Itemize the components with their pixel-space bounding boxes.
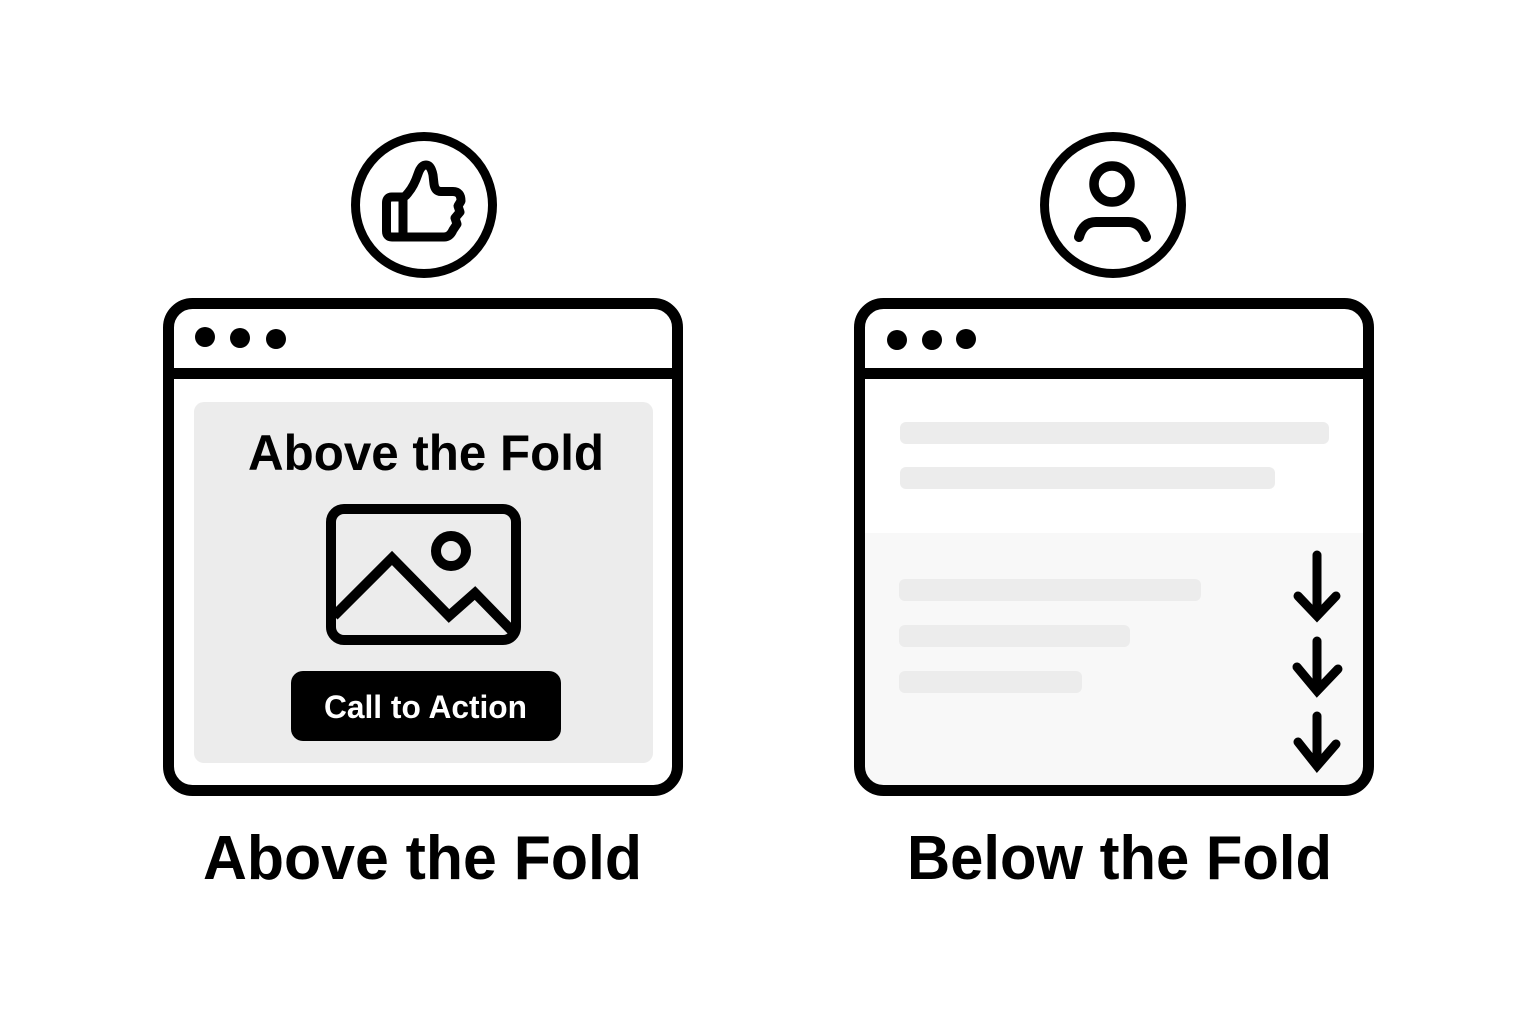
caption: below the fold: Below the Fold [907, 824, 1332, 893]
button: call to action [291, 671, 561, 741]
icon: thumbs up in circle [356, 136, 492, 274]
placeholder text lines [899, 422, 1329, 693]
caption: above the fold: Above the Fold [203, 824, 642, 893]
icon: scroll down arrows [1297, 555, 1338, 766]
button: call to action: Call to Action [324, 689, 527, 725]
window header divider [859, 368, 1369, 379]
browser window: below the fold [859, 304, 1369, 790]
content panel [194, 402, 653, 763]
panel: above the fold [168, 136, 678, 893]
panel: below the fold [859, 136, 1369, 893]
faded lower section [860, 533, 1368, 790]
panel heading: Above the Fold [248, 425, 604, 481]
browser window: above the fold [168, 304, 678, 790]
icon: user in circle [1044, 136, 1182, 274]
window header divider [168, 368, 678, 379]
icon: image placeholder [331, 509, 516, 640]
window control dots [195, 327, 286, 349]
window control dots [887, 329, 976, 350]
